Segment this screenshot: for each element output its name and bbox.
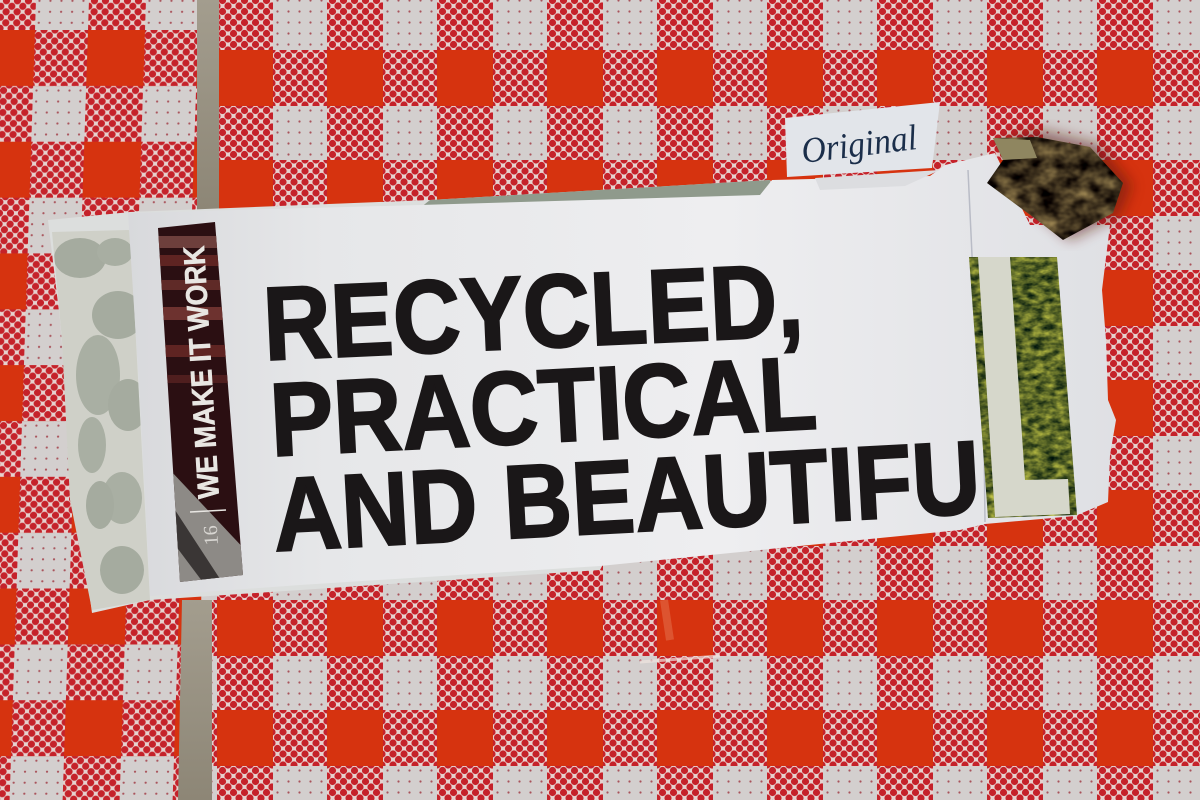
rock paperweight bbox=[987, 130, 1132, 240]
floral pattern panel bbox=[50, 228, 155, 613]
label card: Original: Original bbox=[799, 117, 919, 171]
page number: 16 bbox=[200, 525, 223, 546]
crease between main paper and right piece bbox=[968, 170, 985, 522]
headline line 3: AND BEAUTIFU bbox=[270, 420, 983, 574]
torn edge speckle under the label card bbox=[815, 170, 940, 190]
page divider bbox=[190, 510, 226, 512]
cut-out letter L on grass bbox=[969, 257, 1077, 518]
maroon side banner bbox=[158, 222, 243, 582]
headline line 1: RECYCLED, bbox=[261, 243, 805, 383]
banner stripes and photo wedge bbox=[158, 236, 243, 582]
headline bbox=[261, 243, 983, 574]
crumpled wrinkle in the cloth bbox=[640, 600, 720, 662]
headline line 2: PRACTICAL bbox=[267, 335, 819, 479]
clear tape strip: upper bbox=[197, 0, 219, 210]
banner text: WE MAKE IT WORK bbox=[178, 245, 226, 500]
clear tape strip: lower bbox=[178, 600, 212, 800]
back paper with floral print bbox=[48, 180, 790, 613]
main paper clipping bbox=[128, 153, 1116, 596]
label card: Original bbox=[785, 102, 940, 177]
